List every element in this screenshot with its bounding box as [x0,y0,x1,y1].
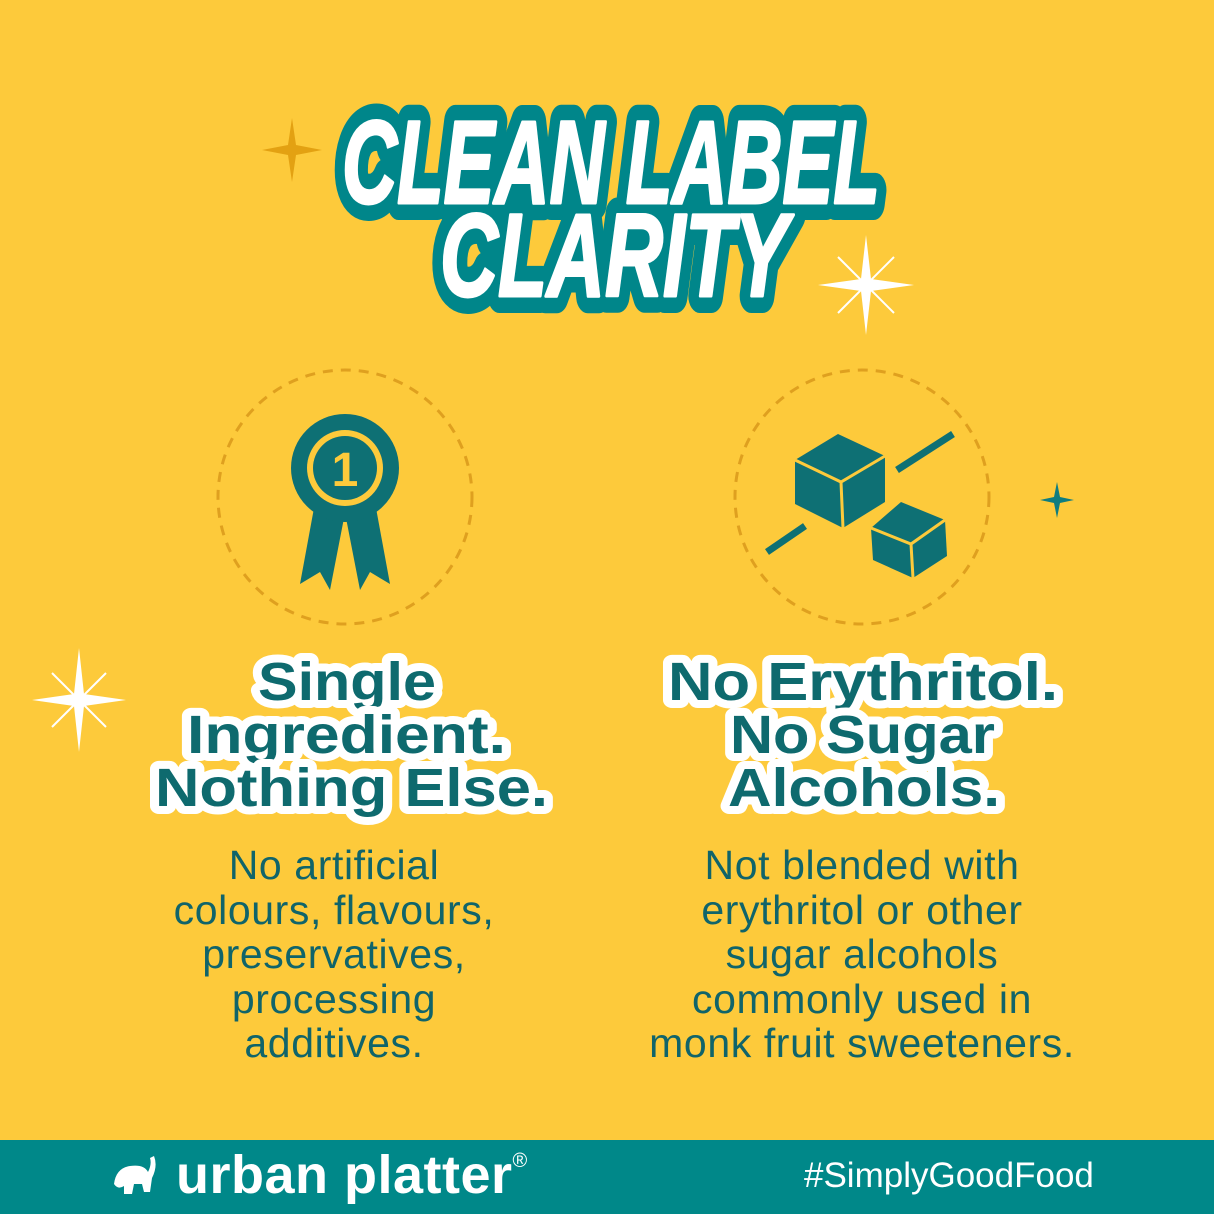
title: CLEAN LABEL [342,97,880,229]
title: CLARITY [440,190,794,322]
icon: sugar cubes crossed [734,368,990,626]
text: left body: colours, flavours, [174,886,494,932]
heading: single ingredient [155,652,548,818]
title: CLEAN LABEL [342,97,880,229]
footer [0,1140,1214,1214]
title: CLARITY [440,190,794,322]
headings [150,652,1063,825]
heading: no erythritol: No Sugar [730,705,995,765]
text: right body [649,842,1075,1066]
icon: award ribbon [216,368,474,626]
hashtag: #SimplyGoodFood [804,1156,1094,1195]
heading: single ingredient: Single [258,652,436,712]
heading: single ingredient: Ingredient. [187,705,506,765]
text: left body: processing [232,976,436,1022]
sparkle: right small teal [1040,482,1074,518]
title [334,97,886,322]
text: right body: Not blended with [704,842,1020,888]
logo text: urban platter® [176,1145,528,1205]
text: right body: erythritol or other [701,886,1023,932]
sparkle: left middle [32,648,126,752]
icon: elephant [114,1156,156,1194]
text: right body: commonly used in [692,976,1032,1022]
heading: no erythritol [668,652,1058,818]
icon: award ribbon: 1 [332,444,358,497]
text: right body: sugar alcohols [726,931,998,977]
text: left body: No artificial [229,842,439,888]
text: left body: additives. [244,1020,424,1066]
sparkle: title left [262,118,322,182]
heading: no erythritol: No Erythritol. [668,652,1058,712]
text: left body: preservatives, [202,931,466,977]
text: left body [174,842,494,1066]
heading: single ingredient: Nothing Else. [155,758,548,818]
sparkle: title right [818,235,914,335]
text: right body: monk fruit sweeteners. [649,1020,1075,1066]
heading: no erythritol: Alcohols. [728,758,1000,818]
